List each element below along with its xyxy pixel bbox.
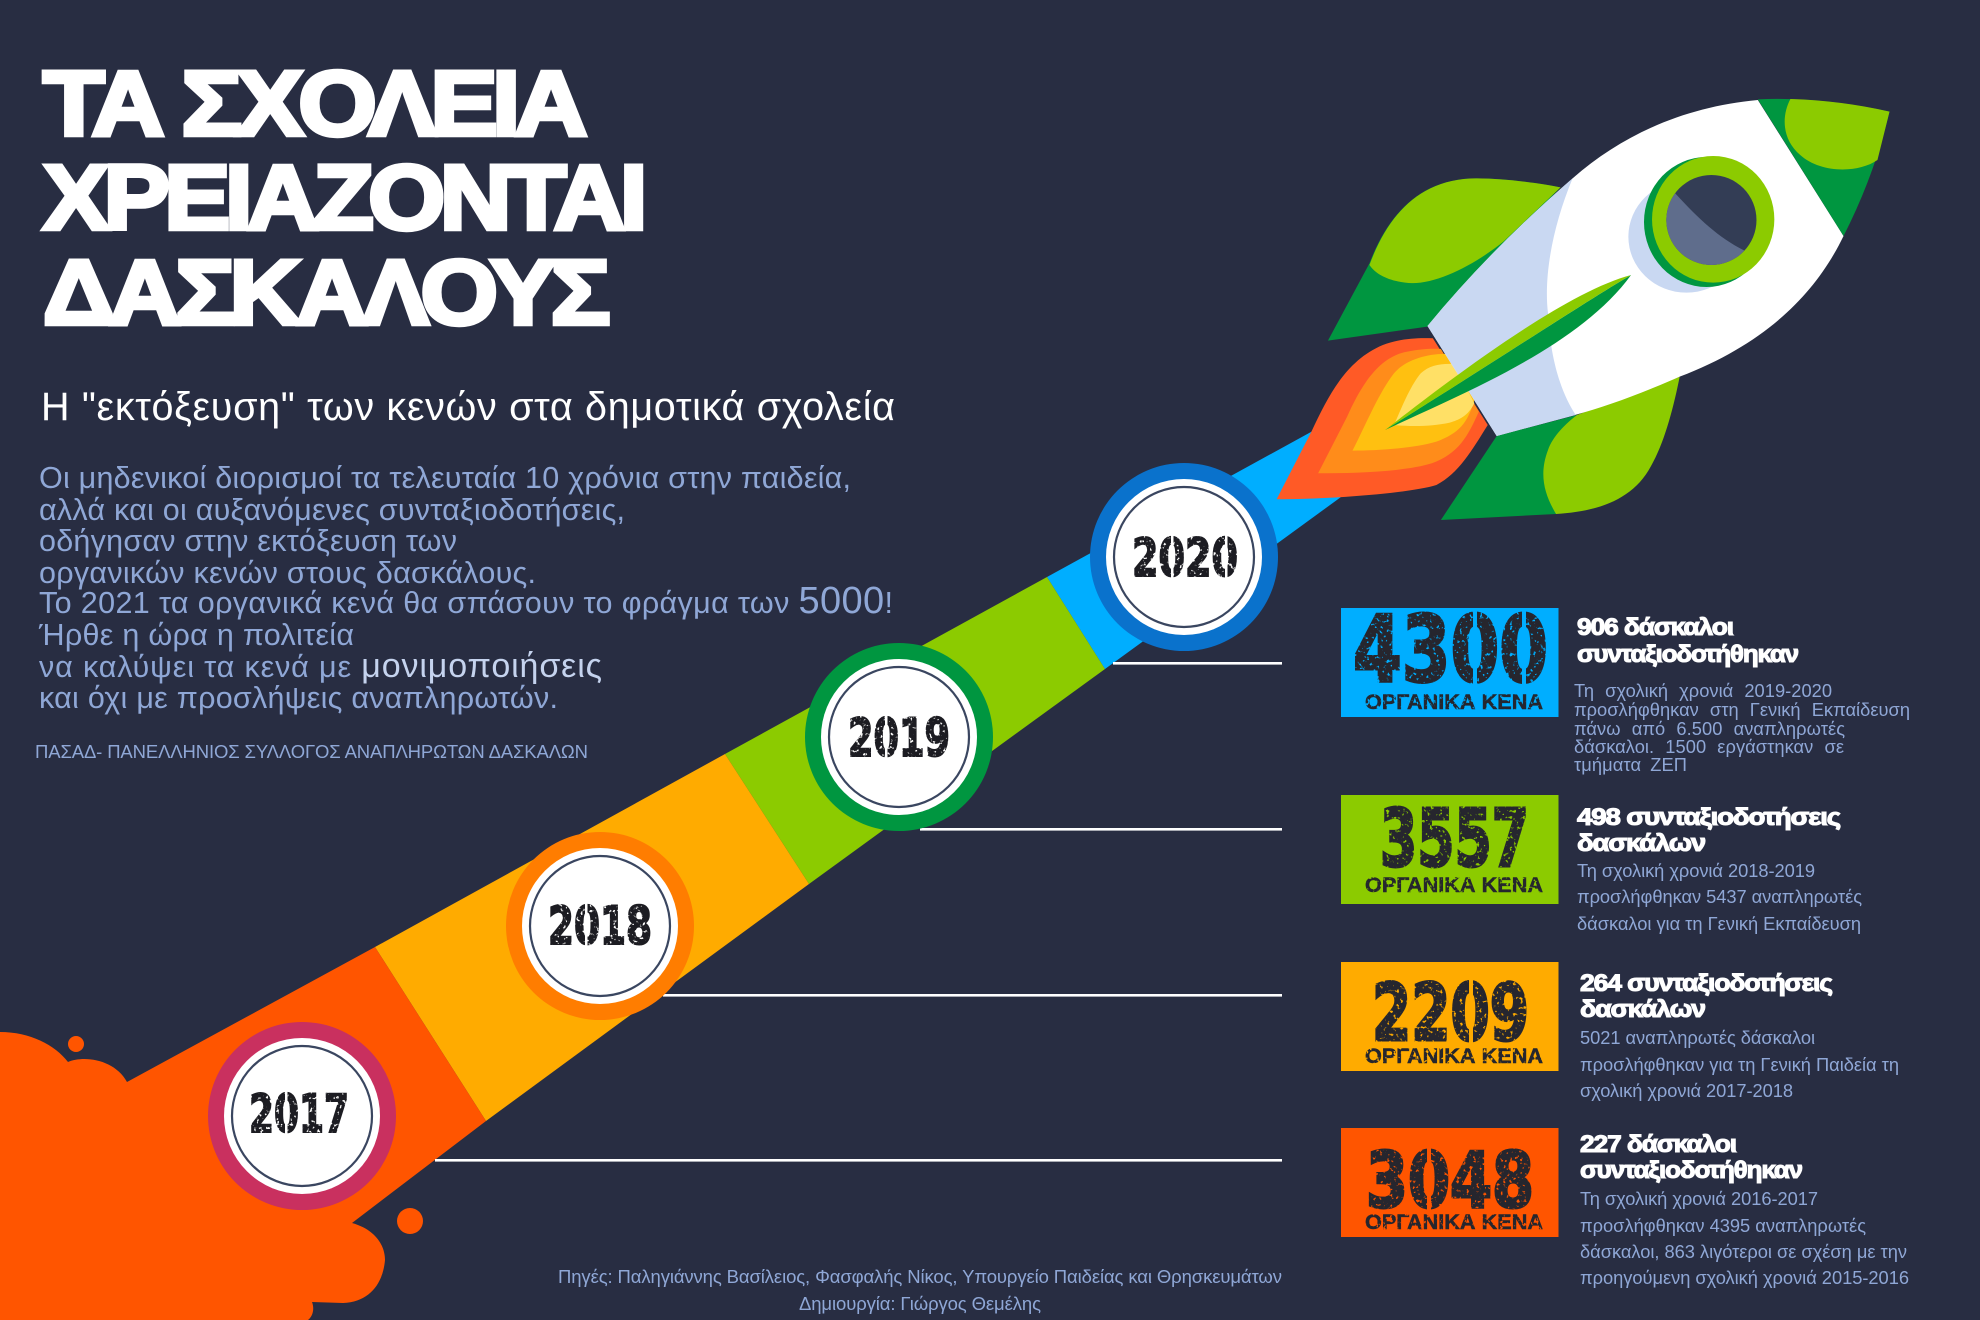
description: δάσκαλοι για τη Γενική Εκπαίδευση xyxy=(1577,913,1861,934)
heading: δασκάλων xyxy=(1577,830,1706,857)
subtitle: Η "εκτόξευση" των κενών στα δημοτικά σχολεία xyxy=(41,385,895,429)
upper fin xyxy=(1328,178,1561,341)
intro paragraph: Οι μηδενικοί διορισμοί τα τελευταία 10 χρόνια στην παιδεία, xyxy=(39,461,851,495)
number box 3048 xyxy=(1341,1128,1558,1237)
number box 3557: ΟΡΓΑΝΙΚΑ ΚΕΝΑ xyxy=(1365,874,1543,897)
description: δάσκαλοι. 1500 εργάστηκαν σε xyxy=(1574,736,1844,757)
title: ΧΡΕΙΑΖΟΝΤΑΙ xyxy=(43,147,642,249)
trail segment: yellow 2018 xyxy=(375,754,809,1121)
description: Τη σχολική χρονιά 2018-2019 xyxy=(1577,860,1815,881)
rocket icon xyxy=(1277,99,1890,520)
heading xyxy=(1580,970,1833,1023)
year badge 2017 xyxy=(208,1022,396,1210)
splash droplet small xyxy=(68,1036,84,1052)
year badge 2017: 2017 xyxy=(249,1084,349,1145)
trail segment: orange splash 2017 xyxy=(0,947,486,1320)
heading: συνταξιοδοτήθηκαν xyxy=(1580,1157,1803,1184)
trail segment: blue 2020 xyxy=(1047,383,1400,669)
body stripe xyxy=(1385,275,1631,430)
description: σχολική χρονιά 2017-2018 xyxy=(1580,1080,1793,1101)
year badge 2018: 2018 xyxy=(548,896,652,957)
heading: 264 συνταξιοδοτήσεις xyxy=(1580,970,1833,997)
number box 3557: 3557 xyxy=(1380,793,1529,885)
porthole xyxy=(1628,156,1774,293)
organisation credit: ΠΑΣΑΔ- ΠΑΝΕΛΛΗΝΙΟΣ ΣΥΛΛΟΓΟΣ ΑΝΑΠΛΗΡΩΤΩΝ ΔΑΣΚΑΛΩΝ xyxy=(35,741,588,762)
trail segment: green 2019 xyxy=(725,577,1105,884)
description: πάνω από 6.500 αναπληρωτές xyxy=(1574,718,1845,739)
description: δάσκαλοι, 863 λιγότεροι σε σχέση με την xyxy=(1580,1241,1907,1262)
number box 4300: 4300 xyxy=(1353,596,1548,703)
heading: δασκάλων xyxy=(1580,996,1706,1023)
sources and creator: Δημιουργία: Γιώργος Θεμέλης xyxy=(799,1293,1041,1314)
description: 5021 αναπληρωτές δάσκαλοι xyxy=(1580,1027,1815,1048)
number box 3048: 3048 xyxy=(1366,1137,1534,1226)
connector line 2017 xyxy=(435,1159,1282,1162)
number box 2209: ΟΡΓΑΝΙΚΑ ΚΕΝΑ xyxy=(1365,1045,1543,1068)
intro paragraph: Ήρθε η ώρα η πολιτεία xyxy=(38,618,354,652)
heading: συνταξιοδοτήθηκαν xyxy=(1577,641,1799,668)
number box 2209 xyxy=(1341,962,1558,1071)
stat panel 2017 xyxy=(1341,1128,1909,1288)
description: τμήματα ΖΕΠ xyxy=(1574,754,1687,775)
intro paragraph: να καλύψει τα κενά με μονιμοποιήσεις xyxy=(39,647,602,685)
number box 2209: 2209 xyxy=(1372,969,1529,1059)
description xyxy=(1574,680,1910,775)
description: Τη σχολική χρονιά 2019-2020 xyxy=(1574,680,1832,701)
heading: 227 δάσκαλοι xyxy=(1580,1131,1736,1158)
description xyxy=(1580,1188,1909,1288)
intro paragraph: Το 2021 τα οργανικά κενά θα σπάσουν το φράγμα των 5000! xyxy=(39,580,893,622)
title: ΤΑ ΣΧΟΛΕΙΑ xyxy=(43,53,586,155)
heading xyxy=(1577,804,1841,857)
heading xyxy=(1577,614,1799,668)
intro paragraph: αλλά και οι αυξανόμενες συνταξιοδοτήσεις, xyxy=(39,493,625,527)
year badge 2020 xyxy=(1090,463,1278,651)
description: προσλήφθηκαν στη Γενική Εκπαίδευση xyxy=(1574,699,1910,720)
number box 4300: ΟΡΓΑΝΙΚΑ ΚΕΝΑ xyxy=(1365,691,1543,714)
description xyxy=(1580,1027,1899,1101)
description: προηγούμενη σχολική χρονιά 2015-2016 xyxy=(1580,1267,1909,1288)
intro paragraph: και όχι με προσλήψεις αναπληρωτών. xyxy=(39,681,558,715)
connector line 2020 xyxy=(1113,662,1282,665)
description: Τη σχολική χρονιά 2016-2017 xyxy=(1580,1188,1818,1209)
description: προσλήφθηκαν 4395 αναπληρωτές xyxy=(1580,1215,1866,1236)
stat panel 2020 xyxy=(1341,596,1910,775)
intro paragraph: οργανικών κενών στους δασκάλους. xyxy=(39,556,536,590)
sources and creator: Πηγές: Παληγιάννης Βασίλειος, Φασφαλής Νίκος, Υπουργείο Παιδείας και Θρησκευμάτων xyxy=(558,1266,1282,1287)
number box 3048: ΟΡΓΑΝΙΚΑ ΚΕΝΑ xyxy=(1365,1211,1543,1234)
year badge 2018 xyxy=(506,832,694,1020)
rising rainbow trail xyxy=(0,383,1400,1320)
description: προσλήφθηκαν 5437 αναπληρωτές xyxy=(1577,886,1862,907)
stat panel 2018 xyxy=(1341,962,1899,1101)
stat panel 2019 xyxy=(1341,793,1862,934)
number box 4300 xyxy=(1341,596,1558,717)
intro paragraph xyxy=(38,461,893,715)
sources and creator xyxy=(558,1266,1282,1314)
year badge 2019: 2019 xyxy=(848,708,950,769)
rocket nose xyxy=(1758,99,1890,236)
connector line 2019 xyxy=(920,828,1282,831)
intro paragraph: οδήγησαν στην εκτόξευση των xyxy=(39,524,457,558)
connector line 2018 xyxy=(663,994,1282,997)
description: προσλήφθηκαν για τη Γενική Παιδεία τη xyxy=(1580,1054,1899,1075)
lower fin xyxy=(1441,377,1680,520)
heading xyxy=(1580,1131,1803,1184)
year badge 2019 xyxy=(805,643,993,831)
rocket body xyxy=(1427,100,1844,436)
heading: 498 συνταξιοδοτήσεις xyxy=(1577,804,1841,831)
heading: 906 δάσκαλοι xyxy=(1577,614,1733,641)
description xyxy=(1577,860,1862,934)
number box 3557 xyxy=(1341,793,1558,904)
title xyxy=(43,53,642,344)
flame xyxy=(1277,338,1488,499)
title: ΔΑΣΚΑΛΟΥΣ xyxy=(43,242,608,344)
year badge 2020: 2020 xyxy=(1132,528,1238,589)
splash droplet large xyxy=(397,1208,423,1234)
